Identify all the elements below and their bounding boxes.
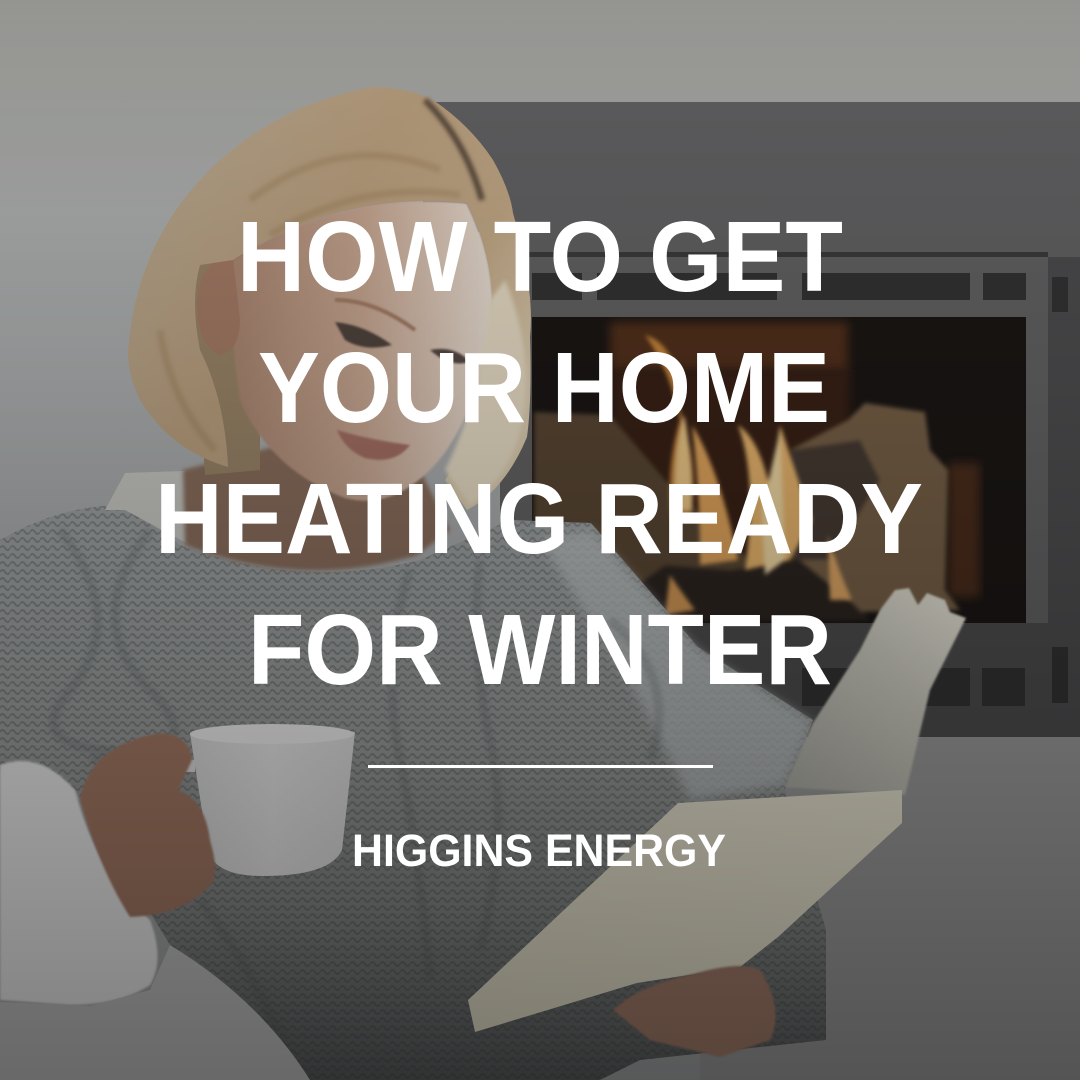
left pillow [0, 761, 158, 1005]
woman: neck and collar [105, 440, 450, 570]
title: FOR WINTER [248, 594, 832, 706]
coffee mug [135, 724, 355, 876]
reading hand [613, 966, 776, 1057]
book lower pages [468, 790, 902, 1032]
sweater cable folds [54, 530, 659, 1060]
flames [645, 335, 852, 615]
title: HOW TO GET [237, 201, 843, 313]
open book [468, 588, 966, 1057]
sofa [700, 737, 1080, 1080]
cushion [0, 945, 310, 1080]
hair parting [425, 100, 482, 200]
logs [534, 403, 960, 622]
sleeve highlight [540, 530, 812, 800]
hair strands [160, 155, 460, 450]
brand name: HIGGINS ENERGY [352, 825, 726, 876]
woman: hair [128, 87, 531, 510]
woman: face [197, 201, 492, 501]
title: YOUR HOME [258, 332, 830, 444]
title [155, 201, 923, 706]
title: HEATING READY [155, 463, 923, 575]
lips [337, 430, 410, 460]
ear [197, 258, 240, 355]
hair light lower right [445, 280, 526, 505]
book upper page [785, 588, 966, 795]
fireplace lower panel [532, 623, 1048, 737]
eyes [335, 322, 392, 348]
hair behind ear [190, 250, 260, 475]
divider [368, 765, 713, 768]
hand holding mug [80, 733, 215, 917]
fireplace [423, 102, 1080, 737]
fireplace top vents [532, 273, 1068, 703]
firebox [532, 317, 1026, 623]
woman: sweater [0, 505, 826, 1080]
